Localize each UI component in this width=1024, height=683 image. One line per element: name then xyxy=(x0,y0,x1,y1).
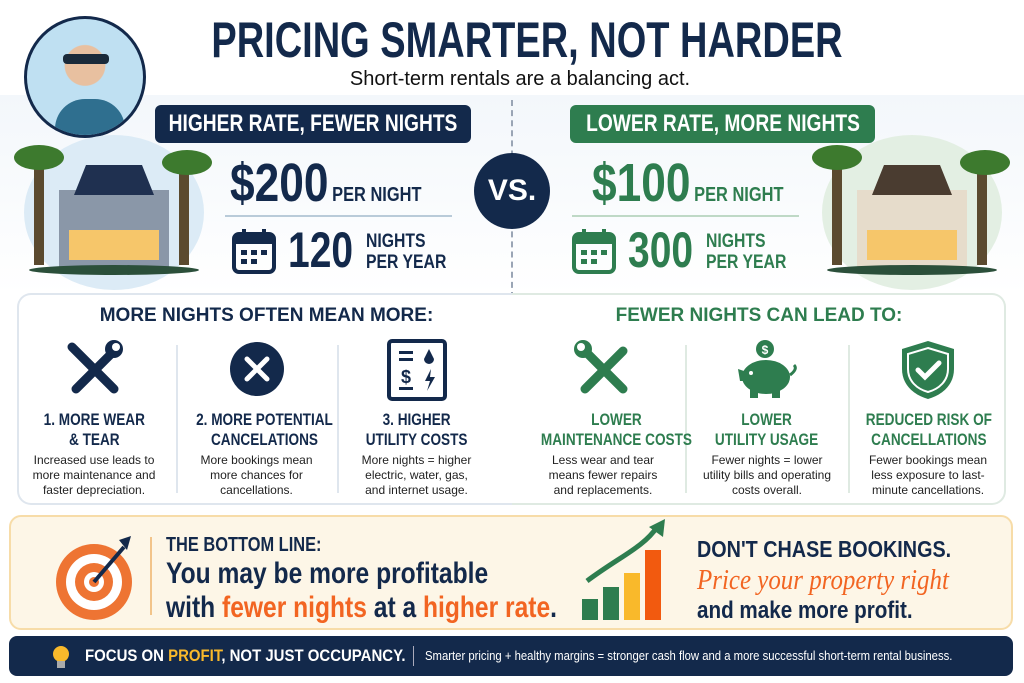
left price: $200 PER NIGHT xyxy=(230,153,421,213)
VS circle: VS. xyxy=(488,174,536,207)
item: utility usage: utility bills and operating xyxy=(703,468,831,482)
item: maintenance: MAINTENANCE COSTS xyxy=(541,430,692,449)
left house illustration xyxy=(14,135,212,290)
item: utility usage: costs overall. xyxy=(732,483,802,497)
item: utility costs: electric, water, gas, xyxy=(365,468,468,482)
item: reduced risk: CANCELLATIONS xyxy=(871,430,987,449)
item: cancelations: 2. MORE POTENTIAL xyxy=(196,410,333,429)
icon: utility bill xyxy=(387,339,447,401)
item: wear & tear: 1. MORE WEAR xyxy=(43,410,145,429)
item: wear & tear: Increased use leads to xyxy=(34,453,154,467)
item: cancelations: CANCELATIONS xyxy=(211,430,318,449)
right nights: PER YEAR xyxy=(706,252,786,273)
item: utility costs: More nights = higher xyxy=(362,453,471,467)
item: reduced risk: Fewer bookings mean xyxy=(869,453,987,467)
right nights: NIGHTS xyxy=(706,231,766,252)
panel: more nights costs xyxy=(17,293,512,505)
bottom line text: THE BOTTOM LINE: xyxy=(166,534,321,556)
background glow xyxy=(0,95,1024,295)
item: maintenance: means fewer repairs xyxy=(549,468,657,482)
chart: growth bars with arrow xyxy=(582,519,665,620)
item: utility usage: UTILITY USAGE xyxy=(715,430,819,449)
call to action text: Price your property right xyxy=(697,564,949,596)
icon: piggy bank: $ xyxy=(762,343,769,357)
avatar xyxy=(24,16,146,138)
item: maintenance xyxy=(541,340,692,497)
item: cancelations: More bookings mean xyxy=(200,453,313,467)
item: utility costs: and internet usage. xyxy=(365,483,468,497)
item: cancelations xyxy=(196,342,333,497)
bottom line panel xyxy=(9,515,1013,630)
item: maintenance: and replacements. xyxy=(554,483,652,497)
footer banner xyxy=(9,636,1013,676)
heading: MORE NIGHTS OFTEN MEAN MORE: xyxy=(100,305,433,326)
left nights: PER YEAR xyxy=(366,252,446,273)
item: maintenance: Less wear and tear xyxy=(552,453,654,467)
call to action text: DON'T CHASE BOOKINGS. xyxy=(697,536,951,562)
item: utility usage xyxy=(703,340,831,497)
item: utility costs xyxy=(362,339,472,497)
icon: tools xyxy=(68,340,123,394)
call to action text: and make more profit. xyxy=(697,597,913,624)
item: wear & tear xyxy=(33,340,155,497)
icon: light bulb xyxy=(53,646,69,668)
item: reduced risk: REDUCED RISK OF xyxy=(866,410,992,429)
item: utility costs: 3. HIGHER xyxy=(382,410,450,429)
heading: FEWER NIGHTS CAN LEAD TO: xyxy=(616,305,902,326)
panel: fewer nights benefits xyxy=(512,293,1006,505)
call to action text xyxy=(696,536,951,624)
right price: $100 PER NIGHT xyxy=(592,153,783,213)
right label: LOWER RATE, MORE NIGHTS xyxy=(586,110,859,137)
right nights: 300 xyxy=(628,222,693,278)
footer headline: FOCUS ON PROFIT, NOT JUST OCCUPANCY. xyxy=(85,646,406,665)
icon: target xyxy=(56,536,132,620)
right nights xyxy=(572,222,786,278)
item: wear & tear: more maintenance and xyxy=(33,468,155,482)
item: utility usage: Fewer nights = lower xyxy=(711,453,823,467)
item: maintenance: LOWER xyxy=(591,410,642,429)
footer note: Smarter pricing + healthy margins = stronger cash flow and a more successful short-term rental business. xyxy=(425,648,952,663)
left nights: NIGHTS xyxy=(366,231,426,252)
item: reduced risk: minute cancellations. xyxy=(872,483,984,497)
item: utility costs: UTILITY COSTS xyxy=(366,430,467,449)
title: PRICING SMARTER, NOT HARDER xyxy=(211,12,843,68)
center dashed divider xyxy=(511,100,513,500)
icon: shield check xyxy=(902,341,954,399)
VS circle xyxy=(474,153,550,229)
icon: x circle xyxy=(230,342,284,396)
item: reduced risk: less exposure to last- xyxy=(871,468,985,482)
left nights: 120 xyxy=(288,222,353,278)
item: utility usage: LOWER xyxy=(742,410,792,429)
bottom line text: with fewer nights at a higher rate. xyxy=(166,591,557,624)
right house illustration xyxy=(812,135,1010,290)
left nights xyxy=(232,222,446,278)
subtitle: Short-term rentals are a balancing act. xyxy=(350,68,690,90)
item: cancelations: cancellations. xyxy=(220,483,293,497)
icon: tools green xyxy=(574,340,628,394)
bottom line text xyxy=(166,534,557,624)
bottom line text: You may be more profitable xyxy=(166,557,488,590)
left label: HIGHER RATE, FEWER NIGHTS xyxy=(169,110,457,137)
icon: calendar xyxy=(232,229,276,274)
icon: calendar green xyxy=(572,229,616,274)
item: reduced risk xyxy=(866,341,992,497)
left label xyxy=(155,105,471,143)
icon: piggy bank xyxy=(738,340,797,398)
item: wear & tear: & TEAR xyxy=(69,430,119,449)
item: wear & tear: faster depreciation. xyxy=(43,483,145,497)
item: cancelations: more chances for xyxy=(210,468,303,482)
right label xyxy=(570,105,875,143)
icon: utility bill: $ xyxy=(400,367,411,387)
